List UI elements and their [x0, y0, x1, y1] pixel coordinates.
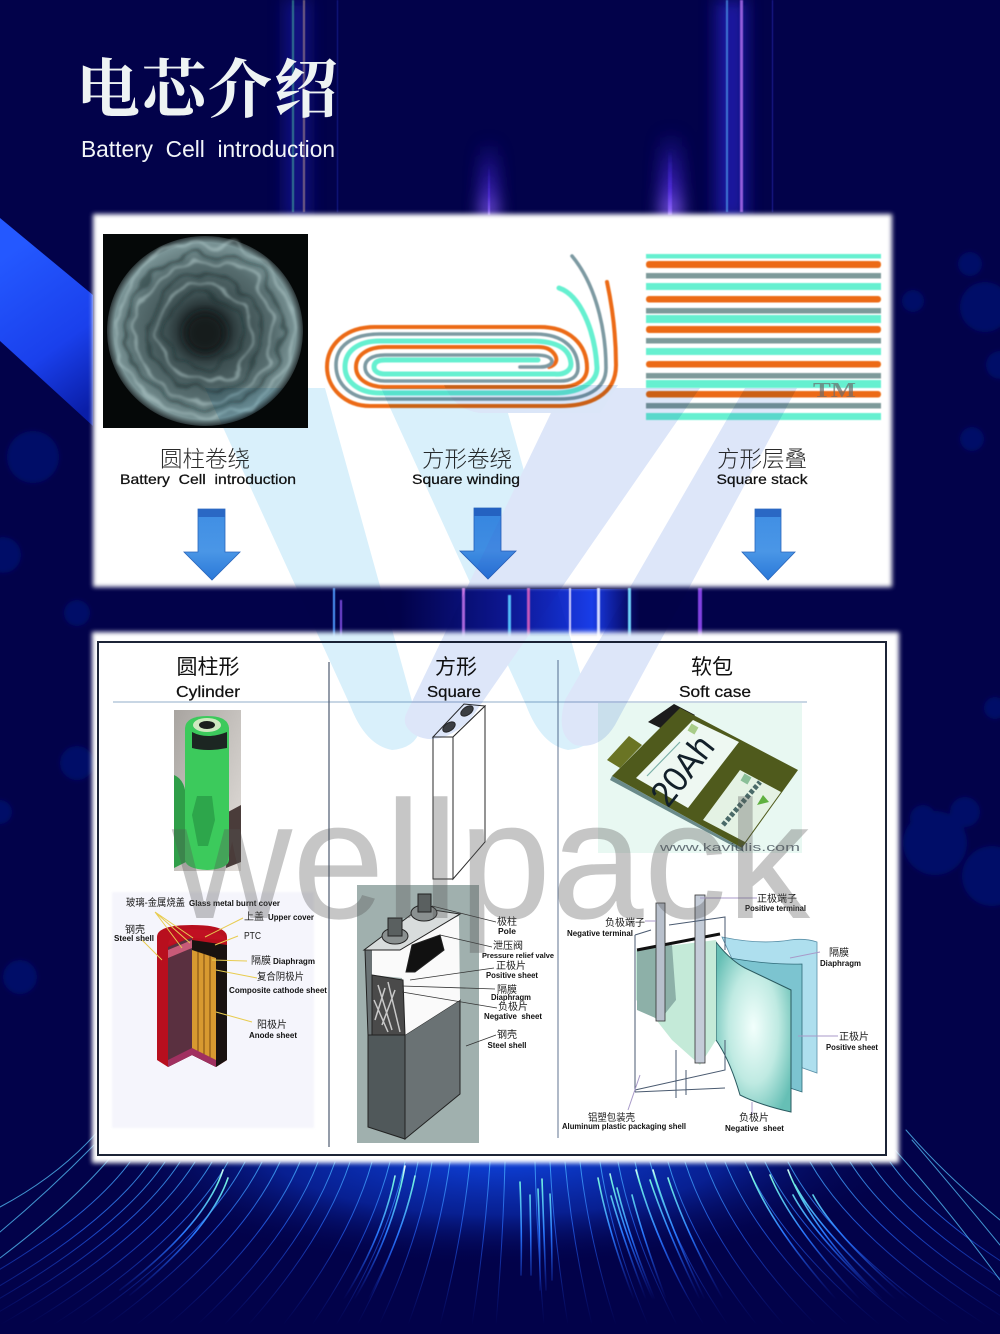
label text: Pressure relief valve [482, 951, 554, 960]
label text: 玻璃-金属烧盖 [126, 896, 185, 909]
heading: soft case: 软包 [691, 656, 733, 679]
label: cylinder winding: 圆柱卷绕 [160, 447, 250, 472]
label: square winding: 方形卷绕 [422, 447, 512, 472]
label text: Positive sheet [486, 971, 538, 980]
diagram: square cell structure [357, 885, 554, 1143]
image: cylindrical winding cross-section [103, 234, 308, 428]
caption: pouch photo website: www.kaviulis.com [658, 842, 800, 854]
diagram: pouch cell structure [562, 892, 878, 1133]
diagram: cylindrical cell structure [112, 892, 327, 1128]
pouch layers [635, 895, 817, 1112]
photo: cylindrical cell [174, 710, 241, 871]
label text: 负极片 [498, 1000, 528, 1013]
heading: soft case [679, 656, 751, 701]
label text: Diaphragm [820, 959, 861, 968]
label text: 隔膜 [251, 955, 271, 967]
column dividers [113, 660, 807, 1147]
label: square stack: Square stack [716, 471, 809, 487]
label text: 隔膜 [497, 984, 517, 996]
watermark: W logo [205, 385, 797, 750]
leader lines [628, 898, 838, 1115]
title chinese: 电芯介绍 [76, 55, 338, 126]
label: square stack [716, 447, 809, 487]
label text: Upper cover [268, 913, 314, 922]
label text: Positive terminal [745, 904, 806, 913]
label text: Steel shell [488, 1041, 526, 1050]
leader lines [142, 912, 257, 1022]
label text: 负极端子 [605, 916, 645, 929]
label: square winding [412, 447, 520, 487]
panel: cell winding types [93, 214, 892, 587]
heading: cylinder [176, 656, 241, 701]
label text: Anode sheet [249, 1031, 297, 1040]
label text: Diaphragm [491, 993, 531, 1002]
label text: 上盖 [244, 910, 264, 923]
label text: Pole [498, 927, 517, 936]
label text: 负极片 [739, 1111, 769, 1124]
label text: 钢壳 [497, 1028, 517, 1041]
photo: 20Ah pouch cell [598, 703, 802, 854]
cylinder cutaway [157, 925, 227, 1067]
label text: 正极片 [839, 1030, 869, 1043]
heading: square: Square [427, 684, 481, 701]
panel: battery cell forms [92, 632, 899, 1163]
watermark: wellpack wordmark: wellpack [171, 766, 811, 954]
title english: Battery Cell introduction [81, 136, 335, 162]
label: cylinder winding: Battery Cell introduction [120, 471, 296, 487]
heading: square [427, 656, 481, 701]
label text: PTC [244, 931, 261, 942]
label text: Composite cathode sheet [229, 986, 327, 995]
arrow: square winding [460, 508, 516, 579]
label text: Diaphragm [273, 957, 315, 966]
trademark mark: TM [813, 378, 856, 402]
label: square stack: 方形层叠 [717, 447, 807, 472]
label text [562, 892, 878, 1133]
label: square winding: Square winding [412, 471, 520, 487]
label text: 隔膜 [829, 947, 849, 959]
arrow: square stack [742, 509, 795, 580]
label text [114, 896, 327, 1040]
label: cylinder winding [120, 447, 296, 487]
label text: Positive sheet [826, 1043, 878, 1052]
label text: Aluminum plastic packaging shell [562, 1122, 686, 1131]
label text: Negative sheet [725, 1124, 784, 1133]
label text: Negative terminal [567, 929, 633, 938]
heading: cylinder: 圆柱形 [176, 656, 240, 679]
title [76, 55, 338, 162]
image: square winding spiral [327, 256, 616, 406]
label text: 铝塑包装壳 [588, 1111, 635, 1124]
fibre light streaks [0, 1130, 1000, 1330]
arrow: cylinder [184, 509, 240, 580]
heading: cylinder: Cylinder [176, 684, 241, 701]
cell cutaway [364, 894, 460, 1139]
label text: 极柱 [497, 915, 517, 928]
label text: 复合阴极片 [257, 970, 304, 983]
label text: Glass metal burnt cover [189, 899, 280, 908]
drawing: square cell outline [433, 704, 485, 879]
label text: 正极片 [496, 959, 526, 972]
leader lines [402, 906, 497, 1046]
panel background [92, 632, 899, 1163]
label text: 泄压阀 [493, 939, 523, 952]
label text [482, 915, 554, 1050]
label text: Steel shell [114, 934, 154, 943]
label text: Negative sheet [484, 1012, 542, 1021]
panel background glow [93, 214, 892, 587]
label text: 阳极片 [257, 1018, 287, 1031]
heading: soft case: Soft case [679, 684, 751, 701]
heading: square: 方形 [435, 656, 477, 679]
image: square stacking layers [646, 254, 881, 420]
photo: 20Ah pouch cell: 20Ah [642, 727, 722, 814]
label text: 正极端子 [757, 892, 797, 905]
label text: 钢壳 [125, 923, 145, 936]
